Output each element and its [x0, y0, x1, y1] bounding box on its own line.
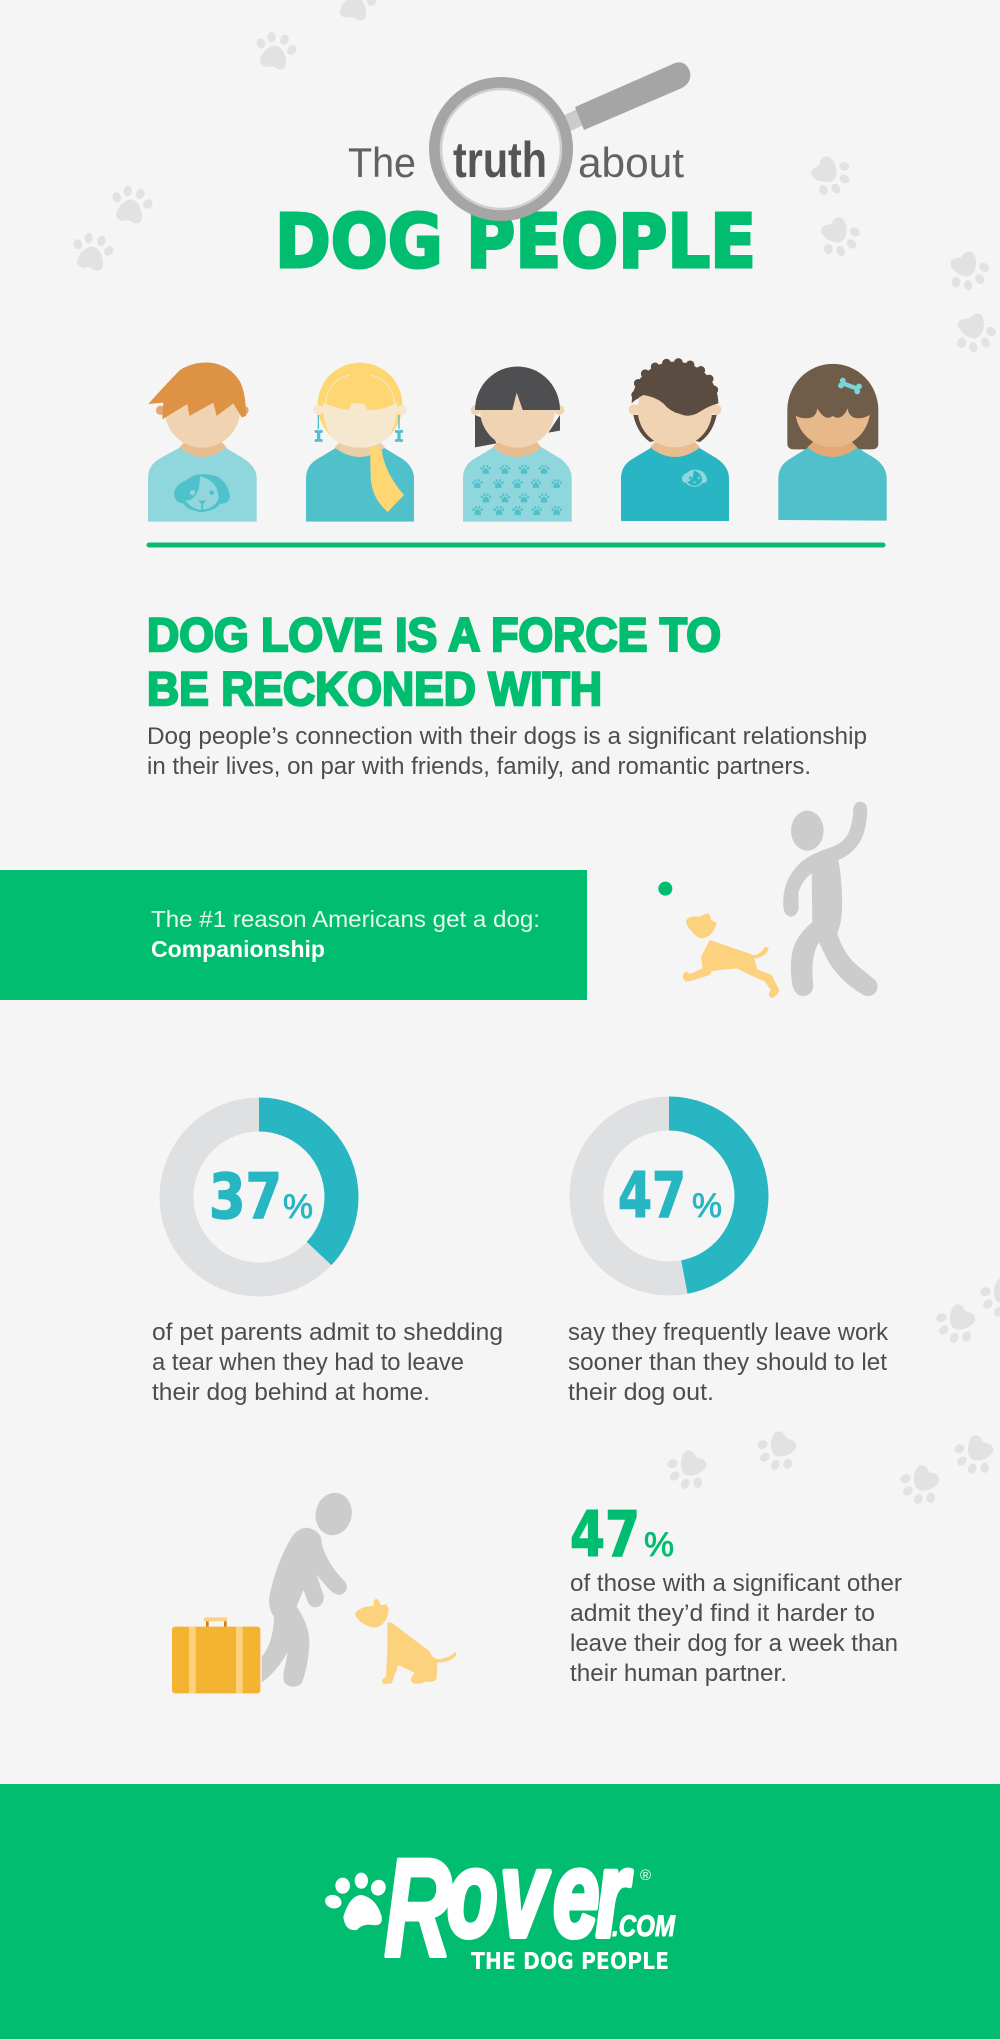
heading: dog love: BE RECKONED WITH: [147, 662, 602, 715]
text: 37 percent caption: a tear when they had to leave: [152, 1349, 464, 1376]
stat: 47 percent significant other: 47: [570, 1498, 640, 1571]
text: 37 percent caption: [152, 1319, 503, 1406]
intro paragraph: in their lives, on par with friends, family, and romantic partners.: [147, 753, 811, 780]
person 1: orange hair: [148, 363, 257, 522]
banner: number one reason: [0, 870, 587, 1000]
text: 47 percent caption: say they frequently leave work: [568, 1319, 889, 1346]
title word: The: The: [348, 139, 416, 186]
chart: 37 percent donut: %: [283, 1188, 313, 1226]
illustration: row of five dog people: [148, 362, 887, 522]
stat: 47 percent significant other: [570, 1498, 902, 1687]
title line: DOG PEOPLE: DOG PEOPLE: [275, 199, 756, 285]
text: 47 percent caption: [568, 1319, 889, 1406]
registered mark: ®: [640, 1867, 651, 1884]
person 2: blonde ponytail: [306, 363, 414, 522]
title: The truth about Dog People: [275, 62, 756, 285]
person 3: black bob, paw print shirt: [463, 366, 572, 522]
text: 37 percent caption: of pet parents admit to shedding: [152, 1319, 503, 1346]
chart: 47 percent donut: 47: [618, 1159, 686, 1232]
logo wordmark: [384, 1827, 676, 1986]
title word: about: about: [578, 139, 684, 186]
heading: dog love: DOG LOVE IS A FORCE TO: [147, 608, 721, 661]
dog running: [683, 913, 779, 998]
stat: 47 percent significant other: leave their dog for a week than: [570, 1630, 898, 1657]
suitcase: [172, 1617, 260, 1693]
logo tagline: THE DOG PEOPLE: [471, 1949, 669, 1975]
person silhouette: [783, 802, 877, 996]
person 4: curly brown hair: [621, 362, 729, 521]
stat: 47 percent significant other: %: [644, 1526, 674, 1564]
banner: number one reason: Companionship: [151, 936, 325, 962]
text: 47 percent caption: their dog out.: [568, 1379, 714, 1406]
chart: 47 percent donut: %: [692, 1187, 722, 1225]
stat: 47 percent significant other: of those with a significant other: [570, 1570, 902, 1597]
sitting dog: [355, 1599, 457, 1684]
title word: truth: truth: [453, 132, 547, 188]
illustration: person with suitcase saying goodbye to dog: [172, 1489, 457, 1693]
stat: 47 percent significant other: their human partner.: [570, 1660, 787, 1687]
stat: 47 percent significant other: admit they’d find it harder to: [570, 1600, 875, 1627]
ball: [658, 882, 672, 896]
intro paragraph: [147, 723, 867, 780]
chart: 37 percent donut: 37: [209, 1160, 282, 1233]
illustration: person throwing ball to dog: [658, 802, 877, 998]
logo wordmark: over: [447, 1827, 633, 1963]
person silhouette: [262, 1489, 356, 1687]
footer band with Rover logo: [0, 1784, 1000, 2039]
heading: dog love: [147, 608, 721, 715]
chart: 47 percent donut: [586, 1114, 752, 1278]
logo wordmark: R: [384, 1829, 452, 1986]
logo wordmark: .COM: [612, 1910, 676, 1943]
text: 37 percent caption: their dog behind at home.: [152, 1379, 430, 1406]
icon: magnifying glass: [434, 62, 690, 216]
text: 47 percent caption: sooner than they should to let: [568, 1349, 887, 1376]
intro paragraph: Dog people’s connection with their dogs is a significant relationship: [147, 723, 867, 750]
chart: 37 percent donut: [176, 1114, 342, 1280]
divider line under people: [149, 542, 883, 548]
logo paw icon: [324, 1873, 388, 1930]
banner: number one reason: The #1 reason Americans get a dog:: [151, 906, 540, 932]
background paw prints: [67, 0, 1000, 1513]
person 5: brown hair, bone clip: [778, 364, 887, 521]
